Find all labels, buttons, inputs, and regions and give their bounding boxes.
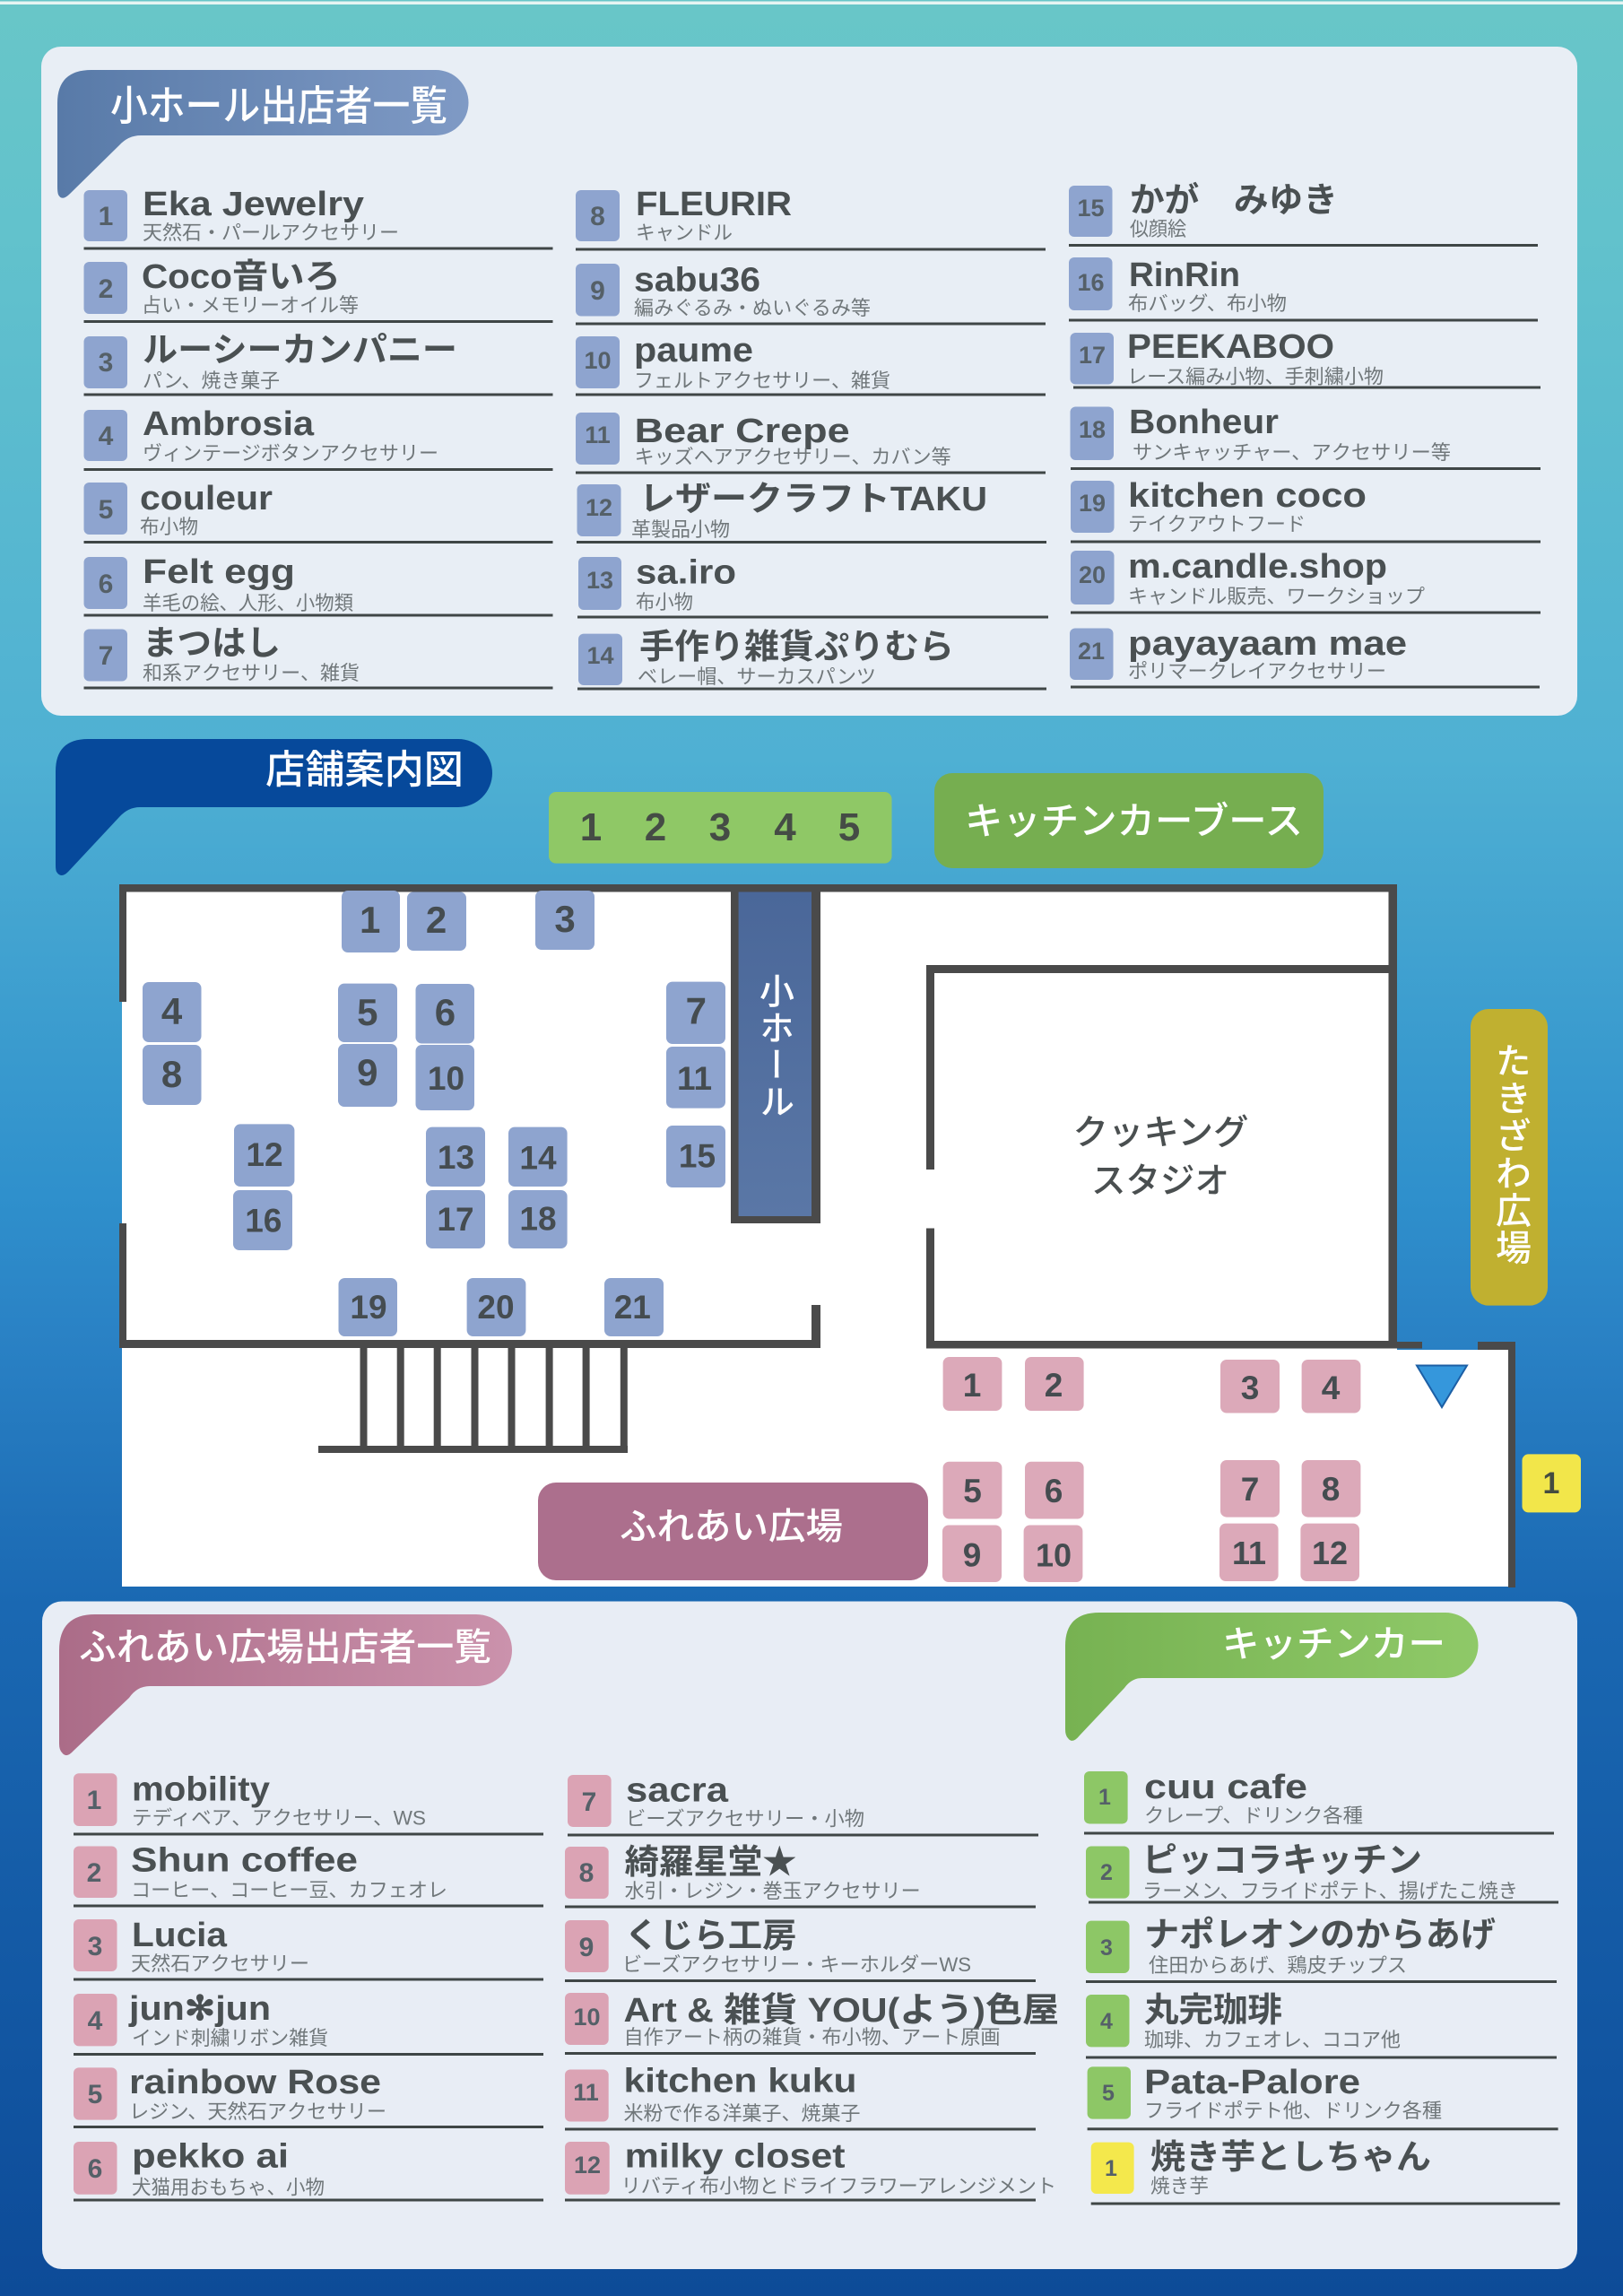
- row 4: 丸完珈琲: [1086, 1992, 1557, 2059]
- row 13: sa.iro: 布小物: [636, 591, 693, 613]
- kitchen car booth numbers: 5: [838, 805, 860, 849]
- row 18: Bonheur: Bonheur: [1129, 404, 1279, 441]
- row 7: sacra: 7: [582, 1787, 596, 1817]
- pink booths 1-12: 8: [1322, 1471, 1340, 1508]
- row 6: pekko ai: 6: [88, 2154, 102, 2184]
- small hall block: 小ホール: [755, 973, 794, 1120]
- row 1: Eka Jewelry: Eka Jewelry: [143, 186, 364, 223]
- row 8: FLEURIR: [576, 186, 1046, 251]
- row 16: RinRin: [1069, 257, 1538, 321]
- row 5: couleur: 布小物: [140, 516, 198, 538]
- pink booths 1-12: 2: [1045, 1367, 1063, 1404]
- blue booths 1-21: 1: [360, 899, 380, 941]
- icon: entrance triangle: [1417, 1365, 1467, 1407]
- row 1: cuu cafe: 1: [1098, 1785, 1111, 1810]
- row 4: jun✻jun: 4: [88, 2006, 103, 2036]
- blue booths 1-21: [143, 891, 725, 1336]
- row 7: sacra: ビーズアクセサリー・小物: [626, 1808, 864, 1830]
- row 11: Bear Crepe: キッズヘアアクセサリー、カバン等: [635, 446, 951, 468]
- heading: small hall exhibitor list: [57, 70, 468, 198]
- row 2: Shun coffee: コーヒー、コーヒー豆、カフェオレ: [131, 1879, 447, 1901]
- row 4: 丸完珈琲: 珈琲、カフェオレ、ココア他: [1144, 2029, 1401, 2051]
- row 1: 焼き芋としちゃん: 焼き芋としちゃん: [1150, 2139, 1431, 2177]
- row 15: かが みゆき: 似顔絵: [1130, 218, 1186, 240]
- row 6: Felt egg: 羊毛の絵、人形、小物類: [143, 592, 353, 614]
- blue booths 1-21: 13: [438, 1139, 474, 1176]
- row 19: kitchen coco: テイクアウトフード: [1128, 513, 1306, 535]
- row 9: sabu36: [576, 262, 1046, 325]
- row 12: レザークラフトTAKU: レザークラフトTAKU: [639, 481, 987, 518]
- row 3: ルーシーカンパニー: 3: [99, 348, 113, 378]
- row 12: milky closet: リバティ布小物とドライフラワーアレンジメント: [621, 2175, 1056, 2197]
- row 3: ルーシーカンパニー: ルーシーカンパニー: [143, 332, 457, 370]
- row 7: まつはし: まつはし: [143, 625, 281, 663]
- blue booths 1-21: 7: [686, 990, 707, 1031]
- row 20: m.candle.shop: キャンドル販売、ワークショップ: [1128, 585, 1425, 608]
- row 9: くじら工房: 9: [579, 1933, 594, 1962]
- row 13: sa.iro: 13: [586, 567, 613, 594]
- cooking studio label: クッキング: [1072, 1114, 1248, 1152]
- pink booths 1-12: 10: [1036, 1536, 1072, 1573]
- takizawa plaza label: [1471, 1009, 1548, 1306]
- row 20: m.candle.shop: 20: [1079, 561, 1106, 588]
- row 8: 綺羅星堂★: 綺羅星堂★: [625, 1844, 797, 1882]
- row 6: pekko ai: 犬猫用おもちゃ、小物: [132, 2177, 325, 2199]
- row 8: FLEURIR: キャンドル: [636, 222, 733, 244]
- heading: kitchen car: キッチンカー: [1222, 1623, 1445, 1665]
- row 1: 焼き芋としちゃん: [1091, 2139, 1560, 2205]
- row 3: Lucia: [74, 1917, 543, 1980]
- blue booths 1-21: 17: [437, 1201, 474, 1238]
- pink booths 1-12: 4: [1322, 1370, 1341, 1406]
- row 21: payayaam mae: 21: [1078, 638, 1105, 665]
- row 2: Coco音いろ: Coco音いろ: [142, 258, 341, 296]
- row 8: 綺羅星堂★: 水引・レジン・巻玉アクセサリー: [625, 1880, 921, 1902]
- row 14: 手作り雑貨ぷりむら: ベレー帽、サーカスパンツ: [638, 665, 876, 688]
- row 19: kitchen coco: [1071, 477, 1541, 544]
- row 10: paume: [576, 332, 1046, 396]
- pink booths 1-12: 7: [1241, 1471, 1259, 1508]
- row 9: くじら工房: [565, 1918, 1036, 1982]
- row 2: Coco音いろ: 占い・メモリーオイル等: [142, 294, 359, 317]
- row 2: ピッコラキッチン: ラーメン、フライドポテト、揚げたこ焼き: [1142, 1880, 1518, 1902]
- row 12: milky closet: milky closet: [625, 2138, 846, 2176]
- heading: fureai plaza exhibitor list: ふれあい広場出店者一覧: [79, 1626, 491, 1668]
- row 8: 綺羅星堂★: 8: [579, 1858, 594, 1888]
- row 15: かが みゆき: [1069, 182, 1538, 247]
- row 10: paume: フェルトアクセサリー、雑貨: [634, 370, 890, 392]
- row 5: rainbow Rose: [74, 2064, 543, 2128]
- row 1: cuu cafe: cuu cafe: [1144, 1769, 1307, 1806]
- row 9: くじら工房: くじら工房: [625, 1918, 797, 1955]
- row 5: rainbow Rose: 5: [88, 2080, 102, 2109]
- row 19: kitchen coco: 19: [1079, 490, 1106, 517]
- row 19: kitchen coco: kitchen coco: [1128, 477, 1367, 515]
- row 5: rainbow Rose: レジン、天然石アクセサリー: [129, 2100, 386, 2123]
- heading: store guide map: [56, 739, 492, 875]
- cooking studio label: [1072, 1114, 1248, 1201]
- yellow booth 1: 1: [1543, 1466, 1559, 1500]
- kitchen car booth numbers: 3: [709, 805, 731, 849]
- fureai plaza label: [538, 1483, 928, 1580]
- row 12: レザークラフトTAKU: 12: [586, 494, 612, 521]
- row 3: Lucia: Lucia: [132, 1917, 228, 1954]
- row 6: pekko ai: [74, 2138, 543, 2201]
- row 3: Lucia: 天然石アクセサリー: [131, 1952, 309, 1975]
- blue booths 1-21: 15: [679, 1137, 716, 1175]
- row 5: rainbow Rose: rainbow Rose: [129, 2064, 381, 2101]
- row 7: まつはし: 7: [99, 641, 113, 671]
- row 9: sabu36: 編みぐるみ・ぬいぐるみ等: [634, 297, 871, 319]
- row 1: Eka Jewelry: [84, 186, 552, 249]
- row 20: m.candle.shop: [1071, 548, 1541, 613]
- row 1: cuu cafe: [1084, 1769, 1554, 1835]
- row 2: ピッコラキッチン: ピッコラキッチン: [1142, 1842, 1422, 1880]
- row 3: ナポレオンのからあげ: 3: [1100, 1935, 1113, 1961]
- row 5: Pata-Palore: 5: [1102, 2081, 1115, 2106]
- row 4: jun✻jun: インド刺繍リボン雑貨: [132, 2027, 328, 2049]
- row 4: jun✻jun: jun✻jun: [128, 1990, 271, 2028]
- row 3: ナポレオンのからあげ: 住田からあげ、鶏皮チップス: [1149, 1954, 1407, 1977]
- row 5: couleur: [84, 480, 552, 544]
- row 14: 手作り雑貨ぷりむら: [577, 629, 1046, 691]
- row 12: milky closet: 12: [574, 2152, 601, 2179]
- pink booths 1-12: 11: [1232, 1535, 1266, 1571]
- row 11: Bear Crepe: Bear Crepe: [635, 413, 850, 450]
- blue booths 1-21: 6: [435, 991, 456, 1033]
- row 3: ナポレオンのからあげ: [1086, 1917, 1557, 1983]
- row 3: ナポレオンのからあげ: ナポレオンのからあげ: [1144, 1917, 1496, 1954]
- row 5: Pata-Palore: [1088, 2064, 1558, 2130]
- row 1: mobility: mobility: [132, 1770, 270, 1808]
- row 6: Felt egg: Felt egg: [143, 553, 295, 591]
- blue booths 1-21: 12: [246, 1136, 283, 1173]
- row 10: Art & 雑貨 YOU(よう)色屋: [565, 1992, 1059, 2055]
- row 11: kitchen kuku: 米粉で作る洋菓子、焼菓子: [624, 2102, 861, 2125]
- pink booths 1-12: 9: [963, 1536, 981, 1573]
- row 5: Pata-Palore: Pata-Palore: [1144, 2064, 1360, 2101]
- row 2: ピッコラキッチン: 2: [1100, 1860, 1113, 1885]
- row 5: Pata-Palore: フライドポテト他、ドリンク各種: [1144, 2100, 1442, 2122]
- row 12: レザークラフトTAKU: [577, 481, 1046, 544]
- pink booths 1-12: 6: [1045, 1473, 1063, 1509]
- blue booths 1-21: 20: [477, 1289, 515, 1326]
- row 11: kitchen kuku: kitchen kuku: [624, 2063, 857, 2100]
- row 10: paume: paume: [634, 332, 753, 370]
- row 7: sacra: sacra: [626, 1772, 729, 1810]
- small hall block: [739, 891, 812, 1216]
- row 5: couleur: 5: [99, 495, 113, 525]
- blue booths 1-21: 14: [519, 1139, 557, 1176]
- row 21: payayaam mae: payayaam mae: [1128, 625, 1407, 663]
- row 4: Ambrosia: 4: [99, 422, 114, 451]
- blue booths 1-21: 10: [428, 1060, 464, 1097]
- row 10: Art & 雑貨 YOU(よう)色屋: 自作アート柄の雑貨・布小物、アート原画: [624, 2026, 1001, 2048]
- kitchen car booth numbers: [549, 792, 891, 864]
- row 10: Art & 雑貨 YOU(よう)色屋: 10: [573, 2004, 601, 2031]
- row 17: PEEKABOO: [1071, 328, 1541, 389]
- row 2: Shun coffee: [74, 1842, 543, 1907]
- blue booths 1-21: 8: [161, 1053, 182, 1095]
- row 11: Bear Crepe: [576, 413, 1046, 474]
- row 6: Felt egg: 6: [99, 570, 113, 599]
- row 8: FLEURIR: FLEURIR: [636, 186, 792, 223]
- blue booths 1-21: 2: [426, 899, 447, 941]
- row 12: レザークラフトTAKU: 革製品小物: [631, 518, 730, 541]
- row 15: かが みゆき: かが みゆき: [1130, 182, 1338, 220]
- heading: kitchen car: [1065, 1613, 1478, 1741]
- pink booths 1-12: 3: [1241, 1370, 1259, 1406]
- row 4: Ambrosia: [84, 405, 552, 471]
- row 1: 焼き芋としちゃん: 1: [1105, 2156, 1117, 2181]
- row 10: paume: 10: [584, 347, 612, 374]
- blue booths 1-21: 16: [245, 1203, 282, 1239]
- row 21: payayaam mae: [1070, 625, 1540, 689]
- row 7: まつはし: [84, 625, 552, 689]
- row 3: ルーシーカンパニー: パン、焼き菓子: [143, 370, 280, 392]
- row 6: Felt egg: [84, 553, 552, 617]
- panel: small hall exhibitors: [41, 47, 1577, 716]
- heading: store guide map: 店舗案内図: [265, 748, 464, 792]
- pink booths 1-12: 12: [1312, 1535, 1348, 1571]
- row 8: 綺羅星堂★: [565, 1844, 1036, 1909]
- row 4: 丸完珈琲: 丸完珈琲: [1144, 1992, 1282, 2030]
- row 7: sacra: [568, 1772, 1038, 1837]
- row 2: Coco音いろ: [84, 258, 552, 323]
- row 18: Bonheur: 18: [1079, 416, 1106, 443]
- row 1: 焼き芋としちゃん: 焼き芋: [1150, 2175, 1209, 2197]
- heading: small hall exhibitor list: 小ホール出店者一覧: [110, 83, 447, 129]
- row 6: pekko ai: pekko ai: [132, 2138, 289, 2176]
- row 17: PEEKABOO: レース編み小物、手刺繍小物: [1127, 366, 1384, 387]
- row 11: Bear Crepe: 11: [585, 422, 611, 448]
- row 1: cuu cafe: クレープ、ドリンク各種: [1144, 1805, 1363, 1827]
- row 4: 丸完珈琲: 4: [1100, 2009, 1113, 2034]
- row 9: sabu36: sabu36: [634, 262, 760, 300]
- row 8: FLEURIR: 8: [590, 202, 605, 231]
- row 17: PEEKABOO: 17: [1079, 342, 1106, 369]
- row 10: Art & 雑貨 YOU(よう)色屋: Art & 雑貨 YOU(よう)色屋: [624, 1992, 1059, 2030]
- row 13: sa.iro: sa.iro: [636, 554, 736, 592]
- blue booths 1-21: 3: [554, 898, 576, 940]
- row 1: mobility: テディベア、アクセサリー、WS: [132, 1806, 426, 1830]
- row 11: kitchen kuku: 11: [573, 2079, 599, 2106]
- row 11: kitchen kuku: [565, 2063, 1036, 2131]
- blue booths 1-21: 19: [350, 1289, 387, 1326]
- row 18: Bonheur: サンキャッチャー、アクセサリー等: [1133, 441, 1451, 464]
- row 18: Bonheur: [1071, 404, 1541, 470]
- kitchen car booth label: キッチンカーブース: [965, 800, 1303, 842]
- kitchen car booth numbers: 1: [580, 805, 602, 849]
- pink booths 1-12: 1: [963, 1367, 981, 1404]
- stairs: [318, 1346, 628, 1453]
- row 20: m.candle.shop: m.candle.shop: [1128, 548, 1387, 586]
- row 3: Lucia: 3: [88, 1932, 102, 1961]
- kitchen car booth numbers: 2: [645, 805, 666, 849]
- panel: fureai plaza and kitchen car exhibitors: [42, 1602, 1577, 2269]
- row 4: jun✻jun: [74, 1990, 543, 2056]
- row 4: Ambrosia: Ambrosia: [143, 405, 315, 443]
- row 9: くじら工房: ビーズアクセサリー・キーホルダーWS: [622, 1953, 971, 1976]
- blue booths 1-21: 11: [677, 1060, 712, 1097]
- pink booths 1-12: 5: [963, 1473, 982, 1509]
- row 2: ピッコラキッチン: [1086, 1842, 1558, 1903]
- row 2: Shun coffee: Shun coffee: [131, 1842, 358, 1880]
- row 17: PEEKABOO: PEEKABOO: [1127, 328, 1334, 366]
- blue booths 1-21: 5: [357, 991, 378, 1033]
- row 2: Coco音いろ: 2: [99, 274, 113, 304]
- kitchen car booth numbers: 4: [774, 805, 796, 849]
- blue booths 1-21: 21: [614, 1289, 651, 1326]
- row 2: Shun coffee: 2: [87, 1858, 101, 1888]
- heading: fureai plaza exhibitor list: [59, 1614, 512, 1755]
- row 4: Ambrosia: ヴィンテージボタンアクセサリー: [143, 442, 438, 465]
- floor plan: [119, 884, 1515, 1587]
- row 14: 手作り雑貨ぷりむら: 14: [586, 642, 614, 669]
- row 5: couleur: couleur: [140, 480, 273, 517]
- row 16: RinRin: 布バッグ、布小物: [1128, 292, 1287, 315]
- row 3: ルーシーカンパニー: [84, 332, 552, 396]
- row 13: sa.iro: [577, 554, 1048, 619]
- row 21: payayaam mae: ポリマークレイアクセサリー: [1128, 660, 1386, 683]
- kitchen car booth label: [934, 773, 1324, 868]
- takizawa plaza label: たきざわ広場: [1490, 1042, 1531, 1266]
- row 15: かが みゆき: 15: [1077, 195, 1105, 222]
- blue booths 1-21: 18: [519, 1201, 557, 1238]
- row 12: milky closet: [565, 2138, 1056, 2201]
- fureai plaza label: ふれあい広場: [620, 1506, 843, 1547]
- pink booths 1-12: [942, 1357, 1360, 1582]
- row 9: sabu36: 9: [590, 276, 605, 306]
- row 16: RinRin: RinRin: [1129, 257, 1240, 294]
- row 7: まつはし: 和系アクセサリー、雑貨: [143, 662, 360, 684]
- row 1: mobility: 1: [87, 1786, 101, 1815]
- yellow booth 1: [1523, 1454, 1581, 1512]
- cooking studio label: スタジオ: [1091, 1162, 1229, 1201]
- row 1: mobility: [74, 1770, 543, 1835]
- blue booths 1-21: 4: [161, 990, 183, 1032]
- row 14: 手作り雑貨ぷりむら: 手作り雑貨ぷりむら: [639, 629, 954, 666]
- row 1: Eka Jewelry: 天然石・パールアクセサリー: [143, 222, 399, 244]
- row 1: Eka Jewelry: 1: [99, 202, 113, 231]
- row 16: RinRin: 16: [1077, 269, 1105, 296]
- blue booths 1-21: 9: [357, 1051, 378, 1093]
